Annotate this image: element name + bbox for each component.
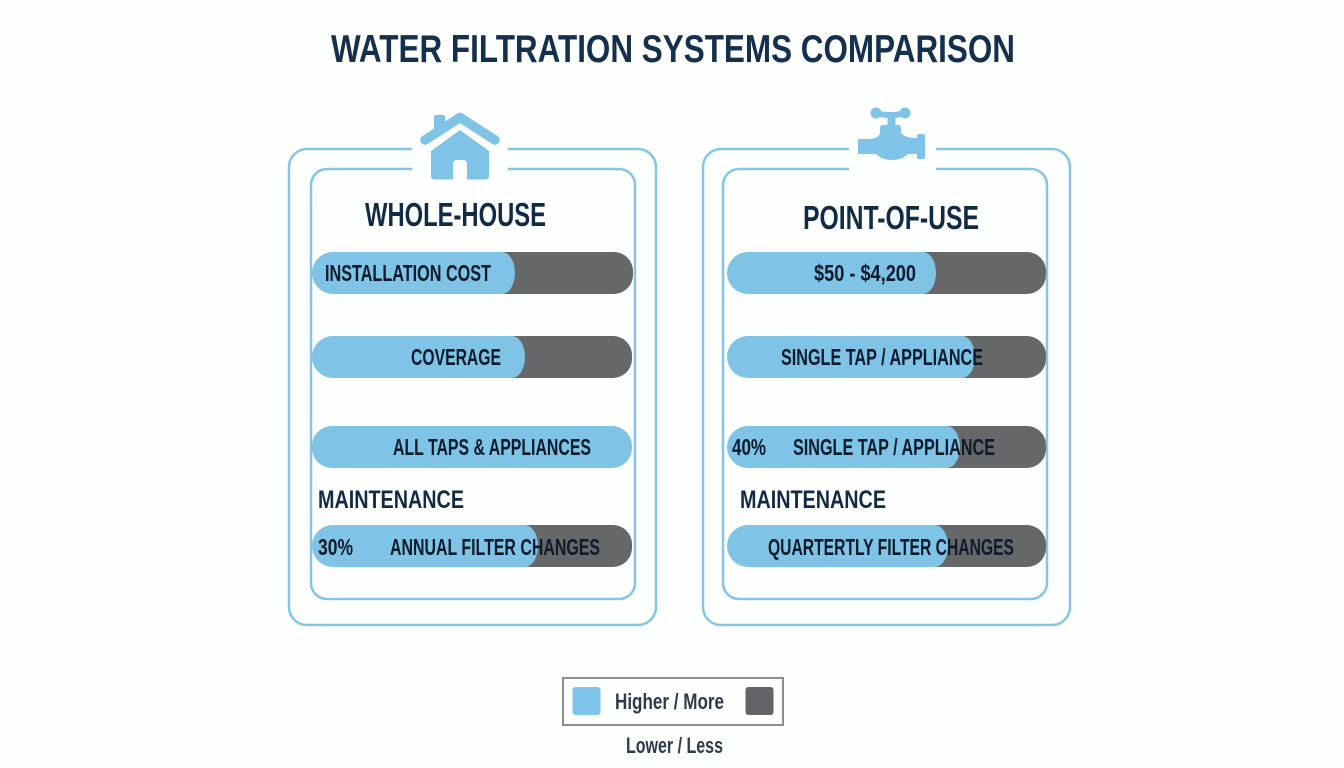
bar: quarterly filter changes [727, 525, 1046, 567]
outer frame: whole-house [289, 149, 656, 625]
bar: all taps and appliances: ALL TAPS & APPLIANCES [393, 434, 591, 460]
bar: installation cost: INSTALLATION COST [325, 260, 491, 286]
swatch: lower or less [746, 687, 774, 715]
bar: coverage: COVERAGE [411, 344, 501, 370]
swatch: higher or more [572, 687, 600, 715]
legend [563, 678, 783, 758]
bar: annual filter changes [312, 525, 632, 567]
bar: coverage [312, 336, 632, 378]
icon: faucet [858, 108, 925, 160]
bar: single tap or appliance [727, 336, 1046, 378]
panel: whole-house [289, 115, 656, 625]
panel: point-of-use [703, 108, 1070, 625]
bar: annual filter changes: 30% [318, 534, 353, 560]
label: maintenance: MAINTENANCE [740, 486, 886, 514]
inner frame: point-of-use [723, 169, 1047, 599]
bar: 40% single tap or appliance: 40% [732, 434, 766, 460]
bar: single tap or appliance: SINGLE TAP / APPLIANCE [781, 344, 983, 370]
bar: 40% single tap or appliance [727, 426, 1046, 468]
legend label: lower or less: Lower / Less [626, 733, 723, 758]
icon: house [425, 115, 495, 180]
inner frame: whole-house [311, 169, 635, 599]
outer frame: point-of-use [703, 149, 1070, 625]
bar: all taps and appliances [312, 426, 632, 468]
bar: annual filter changes: ANNUAL FILTER CHANGES [390, 534, 600, 560]
bar: price range [727, 252, 1046, 294]
legend label: higher or more: Higher / More [615, 689, 724, 714]
bar: 40% single tap or appliance: SINGLE TAP / APPLIANCE [793, 434, 995, 460]
bar: quarterly filter changes: QUARTERTLY FILTER CHANGES [768, 534, 1014, 560]
title: WATER FILTRATION SYSTEMS COMPARISON [331, 28, 1015, 71]
bar: installation cost [312, 252, 633, 294]
heading: point-of-use: POINT-OF-USE [803, 199, 979, 236]
label: maintenance: MAINTENANCE [318, 486, 464, 514]
heading: whole-house: WHOLE-HOUSE [365, 196, 546, 233]
bar: price range: $50 - $4,200 [814, 260, 916, 286]
legend box [563, 678, 783, 725]
